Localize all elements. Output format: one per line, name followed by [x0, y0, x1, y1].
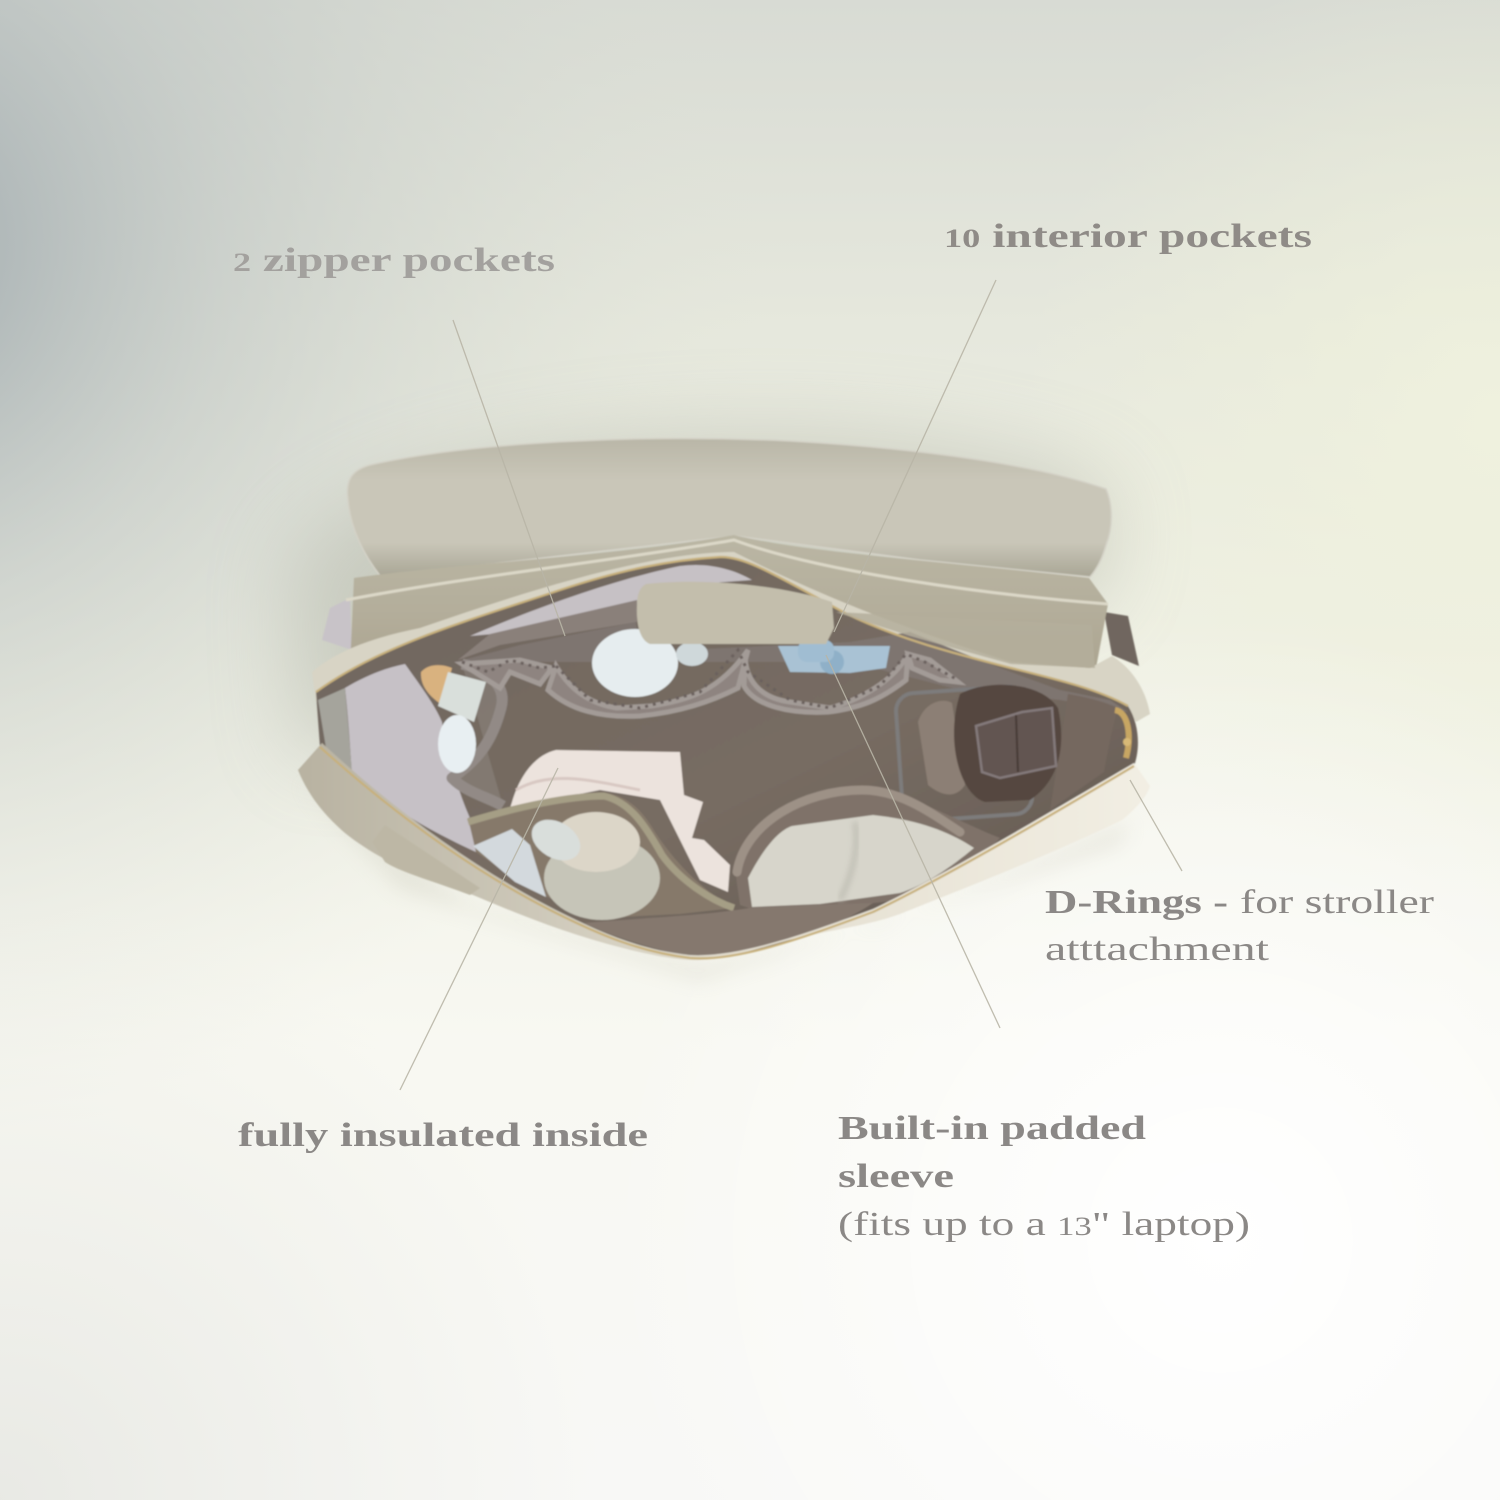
- left pocket ruffle: [452, 664, 503, 806]
- side strap behind bag: [1104, 612, 1139, 666]
- leader: fully insulated inside: [400, 768, 558, 1090]
- band stitching: [346, 540, 1108, 604]
- label: 10 interior pockets: 10 interior pockets: [944, 218, 1312, 255]
- white towel: [473, 829, 546, 897]
- label: built-in padded sleeve: (fits up to a 13 " laptop): [838, 1206, 1250, 1243]
- front pouch flap: [468, 792, 734, 918]
- rolled top flap: [347, 439, 1111, 577]
- crochet toy: [524, 811, 660, 920]
- D-ring: [1115, 710, 1131, 758]
- back inner lavender lining: [470, 565, 752, 636]
- top-middle white ball: [592, 629, 678, 697]
- label: 2 zipper pockets: 2 zipper pockets: [233, 242, 555, 279]
- water bottle in pocket: [895, 685, 1061, 822]
- blue pacifier item: [778, 640, 890, 674]
- taupe back flap: [458, 600, 637, 660]
- leader lines: [400, 280, 1182, 1090]
- right dark gusset: [1050, 694, 1118, 810]
- top pockets: [462, 650, 958, 716]
- brush: [421, 665, 486, 722]
- side gusset left: [318, 688, 352, 772]
- leader: 2 zipper pockets: [453, 320, 565, 636]
- label: D-Rings: atttachment: [1045, 931, 1270, 968]
- gold zippers: [316, 557, 1134, 958]
- diaper pocket: [735, 788, 1000, 915]
- muslin blanket: [510, 750, 730, 892]
- dark back pocket area: [455, 622, 1128, 712]
- label: built-in padded sleeve: sleeve: [838, 1158, 954, 1195]
- leader: D-rings: [1130, 780, 1182, 871]
- label: D-Rings: [1045, 884, 1435, 968]
- label: fully insulated inside: fully insulated inside: [238, 1117, 648, 1154]
- label: D-Rings: D-Rings -: [1045, 884, 1228, 921]
- front rim of bag: [298, 743, 1150, 960]
- folded diaper: [748, 815, 974, 907]
- right side of upper band overlapping: [836, 612, 1095, 668]
- label: D-Rings: for stroller: [1240, 884, 1435, 921]
- bag shadow: [290, 435, 1130, 980]
- left lavender lining: [345, 664, 478, 852]
- label: built-in padded sleeve: [838, 1110, 1250, 1243]
- white item beside ball: [676, 642, 708, 666]
- small white ball: [438, 715, 476, 773]
- lower front leather patch: [372, 825, 480, 895]
- bottom lining inside front: [584, 903, 873, 956]
- leader: 10 interior pockets: [834, 280, 996, 632]
- photo: open diaper bag: [298, 439, 1150, 960]
- leader: built-in padded sleeve: [826, 655, 1000, 1028]
- ruffled pocket edges: [462, 650, 958, 708]
- left strap lining: [322, 598, 352, 650]
- upper band of bag: [350, 535, 1108, 668]
- label: built-in padded sleeve: Built-in padded: [838, 1110, 1146, 1147]
- interior opening: [316, 557, 1138, 958]
- small inner roll strap: [637, 582, 834, 644]
- upper rim along zipper: [312, 552, 1150, 722]
